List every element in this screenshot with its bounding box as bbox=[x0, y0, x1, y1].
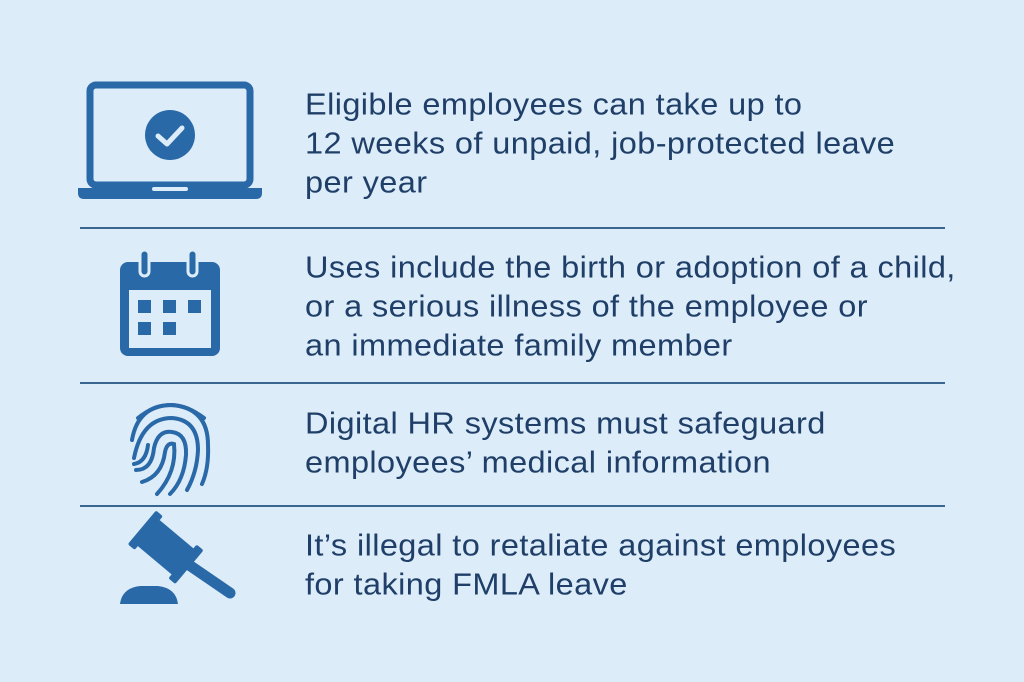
text: uses: or a serious illness of the employee or bbox=[305, 289, 868, 323]
text: 12 weeks: per year bbox=[305, 165, 427, 199]
icon: gavel bbox=[120, 511, 236, 604]
text: digital HR bbox=[305, 406, 826, 479]
icon: calendar bbox=[120, 252, 220, 356]
text: uses bbox=[305, 250, 956, 362]
text: 12 weeks bbox=[305, 87, 895, 199]
text: digital HR: employees’ medical information bbox=[305, 445, 771, 479]
text: uses: Uses include the birth or adoption of a child, bbox=[305, 250, 956, 284]
icon: fingerprint bbox=[130, 403, 210, 496]
text: 12 weeks: Eligible employees can take up to bbox=[305, 87, 802, 121]
text: retaliation bbox=[305, 528, 896, 601]
text: retaliation: for taking FMLA leave bbox=[305, 567, 628, 601]
text: uses: an immediate family member bbox=[305, 328, 733, 362]
text: retaliation: It’s illegal to retaliate against employees bbox=[305, 528, 896, 562]
text: digital HR: Digital HR systems must safeguard bbox=[305, 406, 826, 440]
text: 12 weeks: 12 weeks of unpaid, job-protected leave bbox=[305, 126, 895, 160]
icon: laptop with check bbox=[78, 82, 262, 199]
